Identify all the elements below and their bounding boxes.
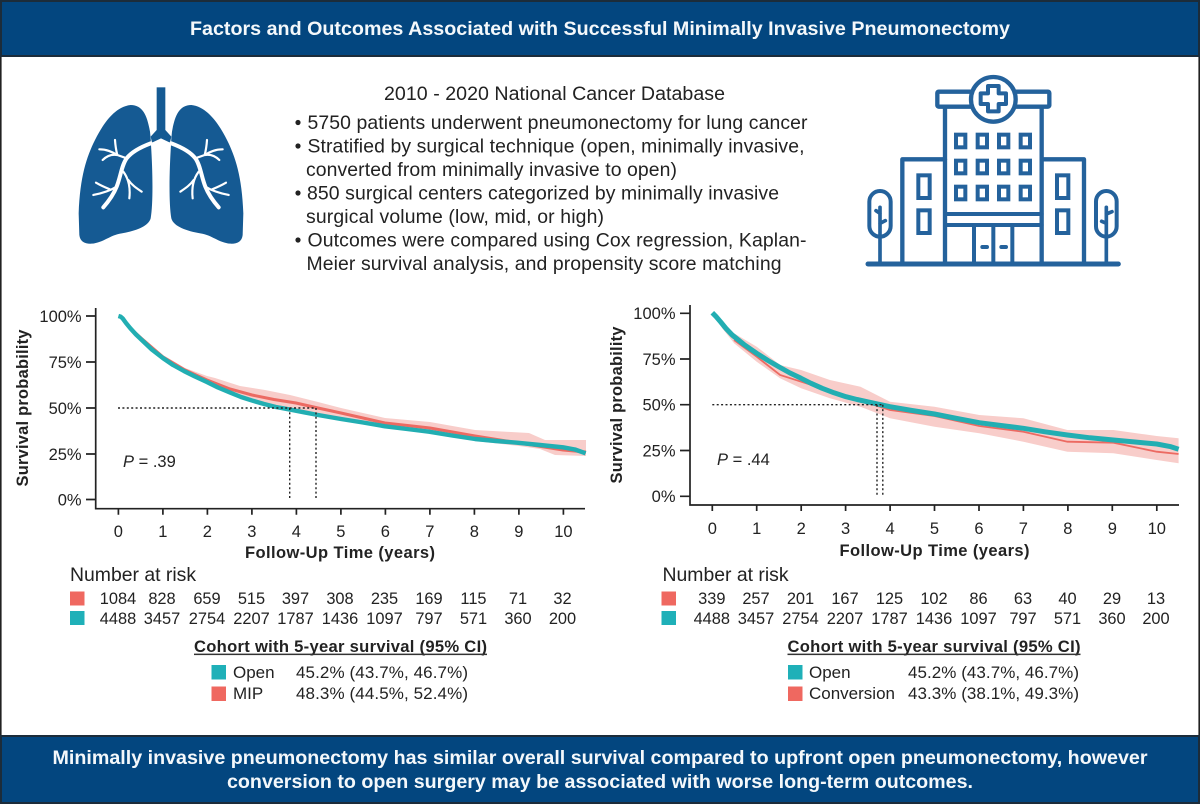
y-axis tick labels: 25% bbox=[49, 446, 82, 464]
row: MIP at risk: 828 bbox=[148, 590, 176, 608]
x-axis tick labels: 9 bbox=[514, 523, 523, 541]
header banner bbox=[0, 0, 1200, 57]
row: open at risk: 797 bbox=[1009, 610, 1037, 628]
y-axis tick labels: 50% bbox=[49, 400, 82, 418]
row: open at risk bbox=[100, 610, 576, 628]
footer banner: conversion to open surgery may be associated with worse long-term outcomes. bbox=[227, 771, 973, 793]
legend heading: Cohort with 5-year survival (95% CI) bbox=[788, 637, 1080, 656]
icon: hospital bbox=[868, 77, 1118, 264]
row: open at risk: 2207 bbox=[827, 610, 863, 628]
x-axis tick labels: 7 bbox=[425, 523, 434, 541]
axis title: x: Follow-Up Time (years) bbox=[245, 544, 435, 562]
x-axis tick labels: 5 bbox=[930, 520, 939, 538]
legend row: open: Open bbox=[233, 663, 275, 682]
y-axis tick labels: 0% bbox=[652, 488, 676, 506]
survival line: open bbox=[118, 316, 586, 453]
row: open at risk: 3457 bbox=[738, 610, 774, 628]
row: open at risk: 4488 bbox=[694, 610, 730, 628]
legend row: open: Open bbox=[809, 663, 851, 682]
title: Factors and Outcomes Associated with Successful Minimally Invasive Pneumonectomy bbox=[190, 18, 1010, 40]
legend row: open: 45.2% (43.7%, 46.7%) bbox=[908, 663, 1079, 682]
confidence band: MIP bbox=[122, 317, 586, 456]
p value: P = .44 bbox=[717, 451, 770, 469]
bullet list: converted from minimally invasive to open) bbox=[306, 159, 677, 181]
x-axis tick labels: 8 bbox=[470, 523, 479, 541]
bullet list: Meier survival analysis, and propensity score matching bbox=[306, 253, 782, 275]
row: open at risk: 571 bbox=[1054, 610, 1081, 628]
icon: lungs bbox=[79, 87, 243, 244]
swatch: open bbox=[662, 611, 676, 625]
x-axis tick labels: 8 bbox=[1063, 520, 1072, 538]
row: MIP at risk: 32 bbox=[553, 590, 572, 608]
p value: P = .39 bbox=[123, 453, 176, 471]
y-axis tick labels bbox=[633, 305, 676, 506]
y-axis tick labels: 25% bbox=[642, 442, 676, 460]
row: conversion at risk: 40 bbox=[1058, 590, 1077, 608]
x-axis tick labels: 3 bbox=[247, 523, 256, 541]
survival line: MIP bbox=[130, 328, 586, 452]
y-axis tick labels: 50% bbox=[642, 397, 676, 415]
row: conversion at risk: 201 bbox=[787, 590, 814, 608]
x-axis tick labels: 6 bbox=[974, 520, 984, 538]
legend row: conversion: Conversion bbox=[809, 684, 895, 703]
row: open at risk: 3457 bbox=[144, 610, 180, 628]
row: open at risk: 1436 bbox=[916, 610, 952, 628]
legend: left cohort survival bbox=[194, 637, 487, 703]
row: MIP at risk: 1084 bbox=[100, 590, 136, 608]
y-axis tick labels: 75% bbox=[642, 351, 676, 369]
row: MIP at risk: 115 bbox=[460, 590, 487, 608]
confidence band: conversion bbox=[715, 313, 1179, 463]
footer banner bbox=[0, 735, 1200, 804]
swatch: open bbox=[70, 611, 84, 625]
legend row: conversion bbox=[788, 684, 1079, 703]
row: MIP at risk: 515 bbox=[238, 590, 265, 608]
axes bbox=[86, 308, 585, 515]
swatch: conversion bbox=[662, 592, 676, 606]
chart: right Kaplan-Meier survival curve, conversion vs open bbox=[608, 305, 1179, 560]
axes bbox=[680, 305, 1179, 511]
x-axis tick labels bbox=[708, 520, 1166, 538]
legend heading: Cohort with 5-year survival (95% CI) bbox=[194, 637, 487, 656]
row: open at risk: 1097 bbox=[960, 610, 997, 628]
table: left number at risk bbox=[70, 564, 576, 628]
legend row: MIP bbox=[212, 684, 468, 703]
row: MIP at risk: 71 bbox=[509, 590, 527, 608]
x-axis tick labels bbox=[114, 523, 573, 541]
row: open at risk: 2207 bbox=[233, 610, 270, 628]
row: MIP at risk: 235 bbox=[371, 590, 398, 608]
y-axis tick labels: 75% bbox=[49, 354, 82, 372]
axis title: x: Follow-Up Time (years) bbox=[840, 542, 1030, 560]
table heading: Number at risk bbox=[662, 564, 789, 586]
row: open at risk: 200 bbox=[1142, 610, 1170, 628]
row: MIP at risk: 169 bbox=[415, 590, 443, 608]
row: open at risk: 1787 bbox=[277, 610, 314, 628]
y-axis tick labels: 0% bbox=[58, 492, 82, 510]
x-axis tick labels: 10 bbox=[554, 523, 573, 541]
row: conversion at risk: 167 bbox=[831, 590, 859, 608]
swatch: MIP bbox=[70, 592, 84, 606]
x-axis tick labels: 1 bbox=[158, 523, 167, 541]
table: right number at risk bbox=[662, 564, 1170, 628]
row: conversion at risk: 257 bbox=[742, 590, 770, 608]
legend row: open: 45.2% (43.7%, 46.7%) bbox=[296, 663, 468, 682]
bullet list: Outcomes were compared using Cox regression, Kaplan- bbox=[308, 230, 806, 252]
text block: study description bbox=[295, 83, 808, 275]
bullet list: Stratified by surgical technique (open, minimally invasive, bbox=[308, 136, 804, 158]
x-axis tick labels: 5 bbox=[336, 523, 345, 541]
legend row: MIP: MIP bbox=[233, 684, 263, 703]
row: open at risk: 1787 bbox=[871, 610, 908, 628]
median survival guides bbox=[712, 405, 883, 496]
row: MIP at risk: 308 bbox=[326, 590, 354, 608]
x-axis tick labels: 3 bbox=[841, 520, 850, 538]
bullet list bbox=[295, 112, 808, 275]
x-axis tick labels: 2 bbox=[203, 523, 212, 541]
median survival guides bbox=[118, 408, 316, 500]
row: open at risk: 360 bbox=[504, 610, 532, 628]
legend row: MIP: 48.3% (44.5%, 52.4%) bbox=[296, 684, 468, 703]
y-axis tick labels bbox=[39, 308, 82, 510]
bullet list: surgical volume (low, mid, or high) bbox=[306, 206, 604, 228]
chart: left Kaplan-Meier survival curve, MIP vs open bbox=[14, 308, 586, 562]
row: MIP at risk bbox=[100, 590, 572, 608]
bullet list: 850 surgical centers categorized by minimally invasive bbox=[307, 182, 779, 204]
x-axis tick labels: 4 bbox=[292, 523, 301, 541]
x-axis tick labels: 7 bbox=[1019, 520, 1028, 538]
x-axis tick labels: 9 bbox=[1108, 520, 1117, 538]
row: open at risk: 360 bbox=[1098, 610, 1126, 628]
row: conversion at risk: 13 bbox=[1147, 590, 1165, 608]
legend row: open bbox=[212, 663, 468, 682]
axis title: y: Survival probability bbox=[14, 329, 32, 486]
x-axis tick labels: 0 bbox=[708, 520, 717, 538]
row: open at risk: 797 bbox=[415, 610, 443, 628]
row: open at risk: 1097 bbox=[366, 610, 403, 628]
y-axis tick labels: 100% bbox=[39, 308, 82, 326]
x-axis tick labels: 10 bbox=[1148, 520, 1166, 538]
row: conversion at risk bbox=[698, 590, 1165, 608]
x-axis tick labels: 1 bbox=[752, 520, 761, 538]
axis title: y: Survival probability bbox=[608, 326, 626, 484]
row: open at risk bbox=[694, 610, 1170, 628]
y-axis tick labels: 100% bbox=[633, 305, 676, 323]
legend row: conversion: 43.3% (38.1%, 49.3%) bbox=[908, 684, 1079, 703]
row: open at risk: 200 bbox=[549, 610, 576, 628]
x-axis tick labels: 6 bbox=[381, 523, 390, 541]
row: open at risk: 2754 bbox=[782, 610, 819, 628]
x-axis tick labels: 2 bbox=[797, 520, 806, 538]
legend: right cohort survival bbox=[788, 637, 1080, 703]
x-axis tick labels: 0 bbox=[114, 523, 123, 541]
row: open at risk: 4488 bbox=[100, 610, 136, 628]
row: MIP at risk: 659 bbox=[193, 590, 221, 608]
row: conversion at risk: 339 bbox=[698, 590, 725, 608]
legend row: open bbox=[788, 663, 1079, 682]
heading: data source: 2010 - 2020 National Cancer Database bbox=[384, 83, 725, 105]
x-axis tick labels: 4 bbox=[886, 520, 895, 538]
row: MIP at risk: 397 bbox=[282, 590, 309, 608]
row: conversion at risk: 102 bbox=[920, 590, 948, 608]
row: conversion at risk: 29 bbox=[1103, 590, 1121, 608]
row: conversion at risk: 86 bbox=[969, 590, 988, 608]
survival line: open bbox=[712, 313, 1179, 449]
row: open at risk: 571 bbox=[460, 610, 487, 628]
row: conversion at risk: 125 bbox=[876, 590, 903, 608]
row: conversion at risk: 63 bbox=[1014, 590, 1032, 608]
survival line: conversion bbox=[734, 340, 1179, 454]
bullet list: 5750 patients underwent pneumonectomy for lung cancer bbox=[308, 112, 808, 134]
table heading: Number at risk bbox=[70, 564, 196, 586]
conclusion text: Minimally invasive pneumonectomy has similar overall survival compared to upfront open pneumonectomy, however bbox=[52, 747, 1148, 769]
row: open at risk: 2754 bbox=[189, 610, 225, 628]
row: open at risk: 1436 bbox=[322, 610, 358, 628]
